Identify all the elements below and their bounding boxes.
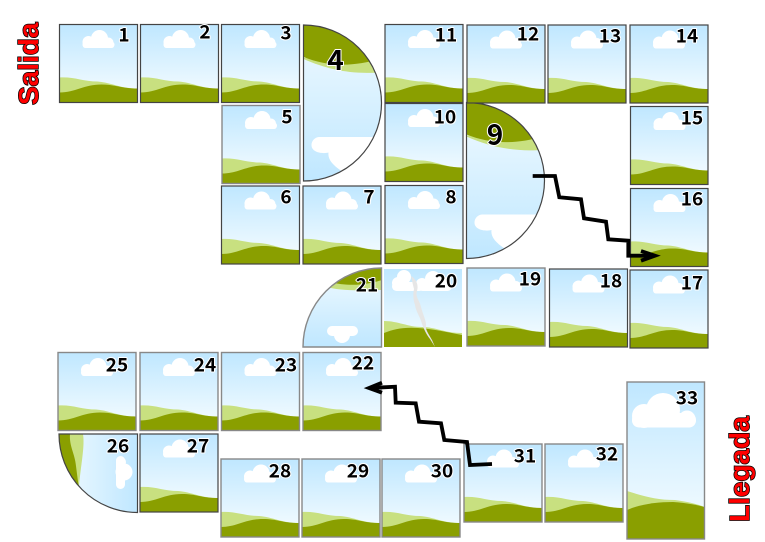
tile 18: 18 [600,266,622,294]
label: Salida: Salida [13,22,44,105]
tile 7 [303,182,381,264]
tile 6 [222,182,300,264]
tile 2 [140,18,218,102]
tile 10 [385,102,463,182]
tile 19 [467,264,545,346]
tile 32: 32 [596,440,618,466]
tile 5 [222,102,300,184]
tile 24: 24 [194,350,216,378]
tile 5: 5 [281,102,293,130]
tile 27 [140,432,218,512]
arrow: 31 to 22 [369,383,492,465]
tile 14: 14 [676,22,698,48]
tile 26: quarter disc: 26 [107,432,129,458]
tile 29: 29 [347,456,369,484]
tile 3 [222,18,300,102]
tile 27: 27 [187,432,209,458]
tile 23 [222,350,300,430]
tile 28 [221,456,299,537]
tile 22 [303,348,381,430]
tile 12: 12 [517,20,539,46]
tile 22: 22 [352,348,374,376]
tile 8: 8 [445,182,457,210]
tile 1 [60,20,138,102]
tile 19: 19 [519,264,541,292]
tile 8 [385,182,463,264]
tile 16 [630,184,708,266]
tile 17 [630,268,708,348]
tile 30: 30 [431,456,453,484]
tile 16: 16 [681,184,703,212]
tile 32 [545,440,623,522]
tile 4: half disc [304,25,384,182]
tile 7: 7 [363,182,375,210]
tile 15 [630,104,708,184]
tile 18 [550,266,628,347]
tile 33: tall finish tile [627,382,704,539]
tile 9: half disc [466,102,546,260]
tile 1: 1 [118,20,130,48]
tile 25: 25 [106,350,128,378]
tile 21: quarter disc [303,268,382,347]
tile 30 [382,456,460,537]
tile 23: 23 [275,350,297,378]
tile 3: 3 [280,18,292,46]
tile 25 [58,350,136,430]
tile 31 [464,442,542,522]
tile 28: 28 [269,456,291,484]
tile 6: 6 [280,182,292,210]
tile 31: 31 [514,442,536,468]
tile 12 [467,20,545,103]
tile 17: 17 [681,268,703,296]
tile 10: 10 [434,102,456,130]
tile 20: tornado [384,266,462,347]
label: Llegada: Llegada [724,416,755,522]
tile 13: 13 [599,22,621,48]
tile 4: half disc: 4 [327,39,344,79]
tile 21: quarter disc: 21 [356,270,378,298]
tile 11: 11 [435,20,457,48]
tile 15: 15 [681,104,703,130]
tile 11 [385,20,463,102]
tile 9: half disc: 9 [487,114,503,154]
tile 14 [630,22,708,103]
tile 24 [140,350,218,430]
tile 20: tornado: 20 [435,266,457,294]
tile 2: 2 [199,18,211,44]
tile 13 [548,22,626,103]
tile 29 [302,456,380,537]
arrow: 9 to 16 [533,176,655,261]
icon: tornado [409,269,435,347]
tile 26: quarter disc [59,432,138,513]
tile 33: tall finish tile: 33 [676,384,698,410]
